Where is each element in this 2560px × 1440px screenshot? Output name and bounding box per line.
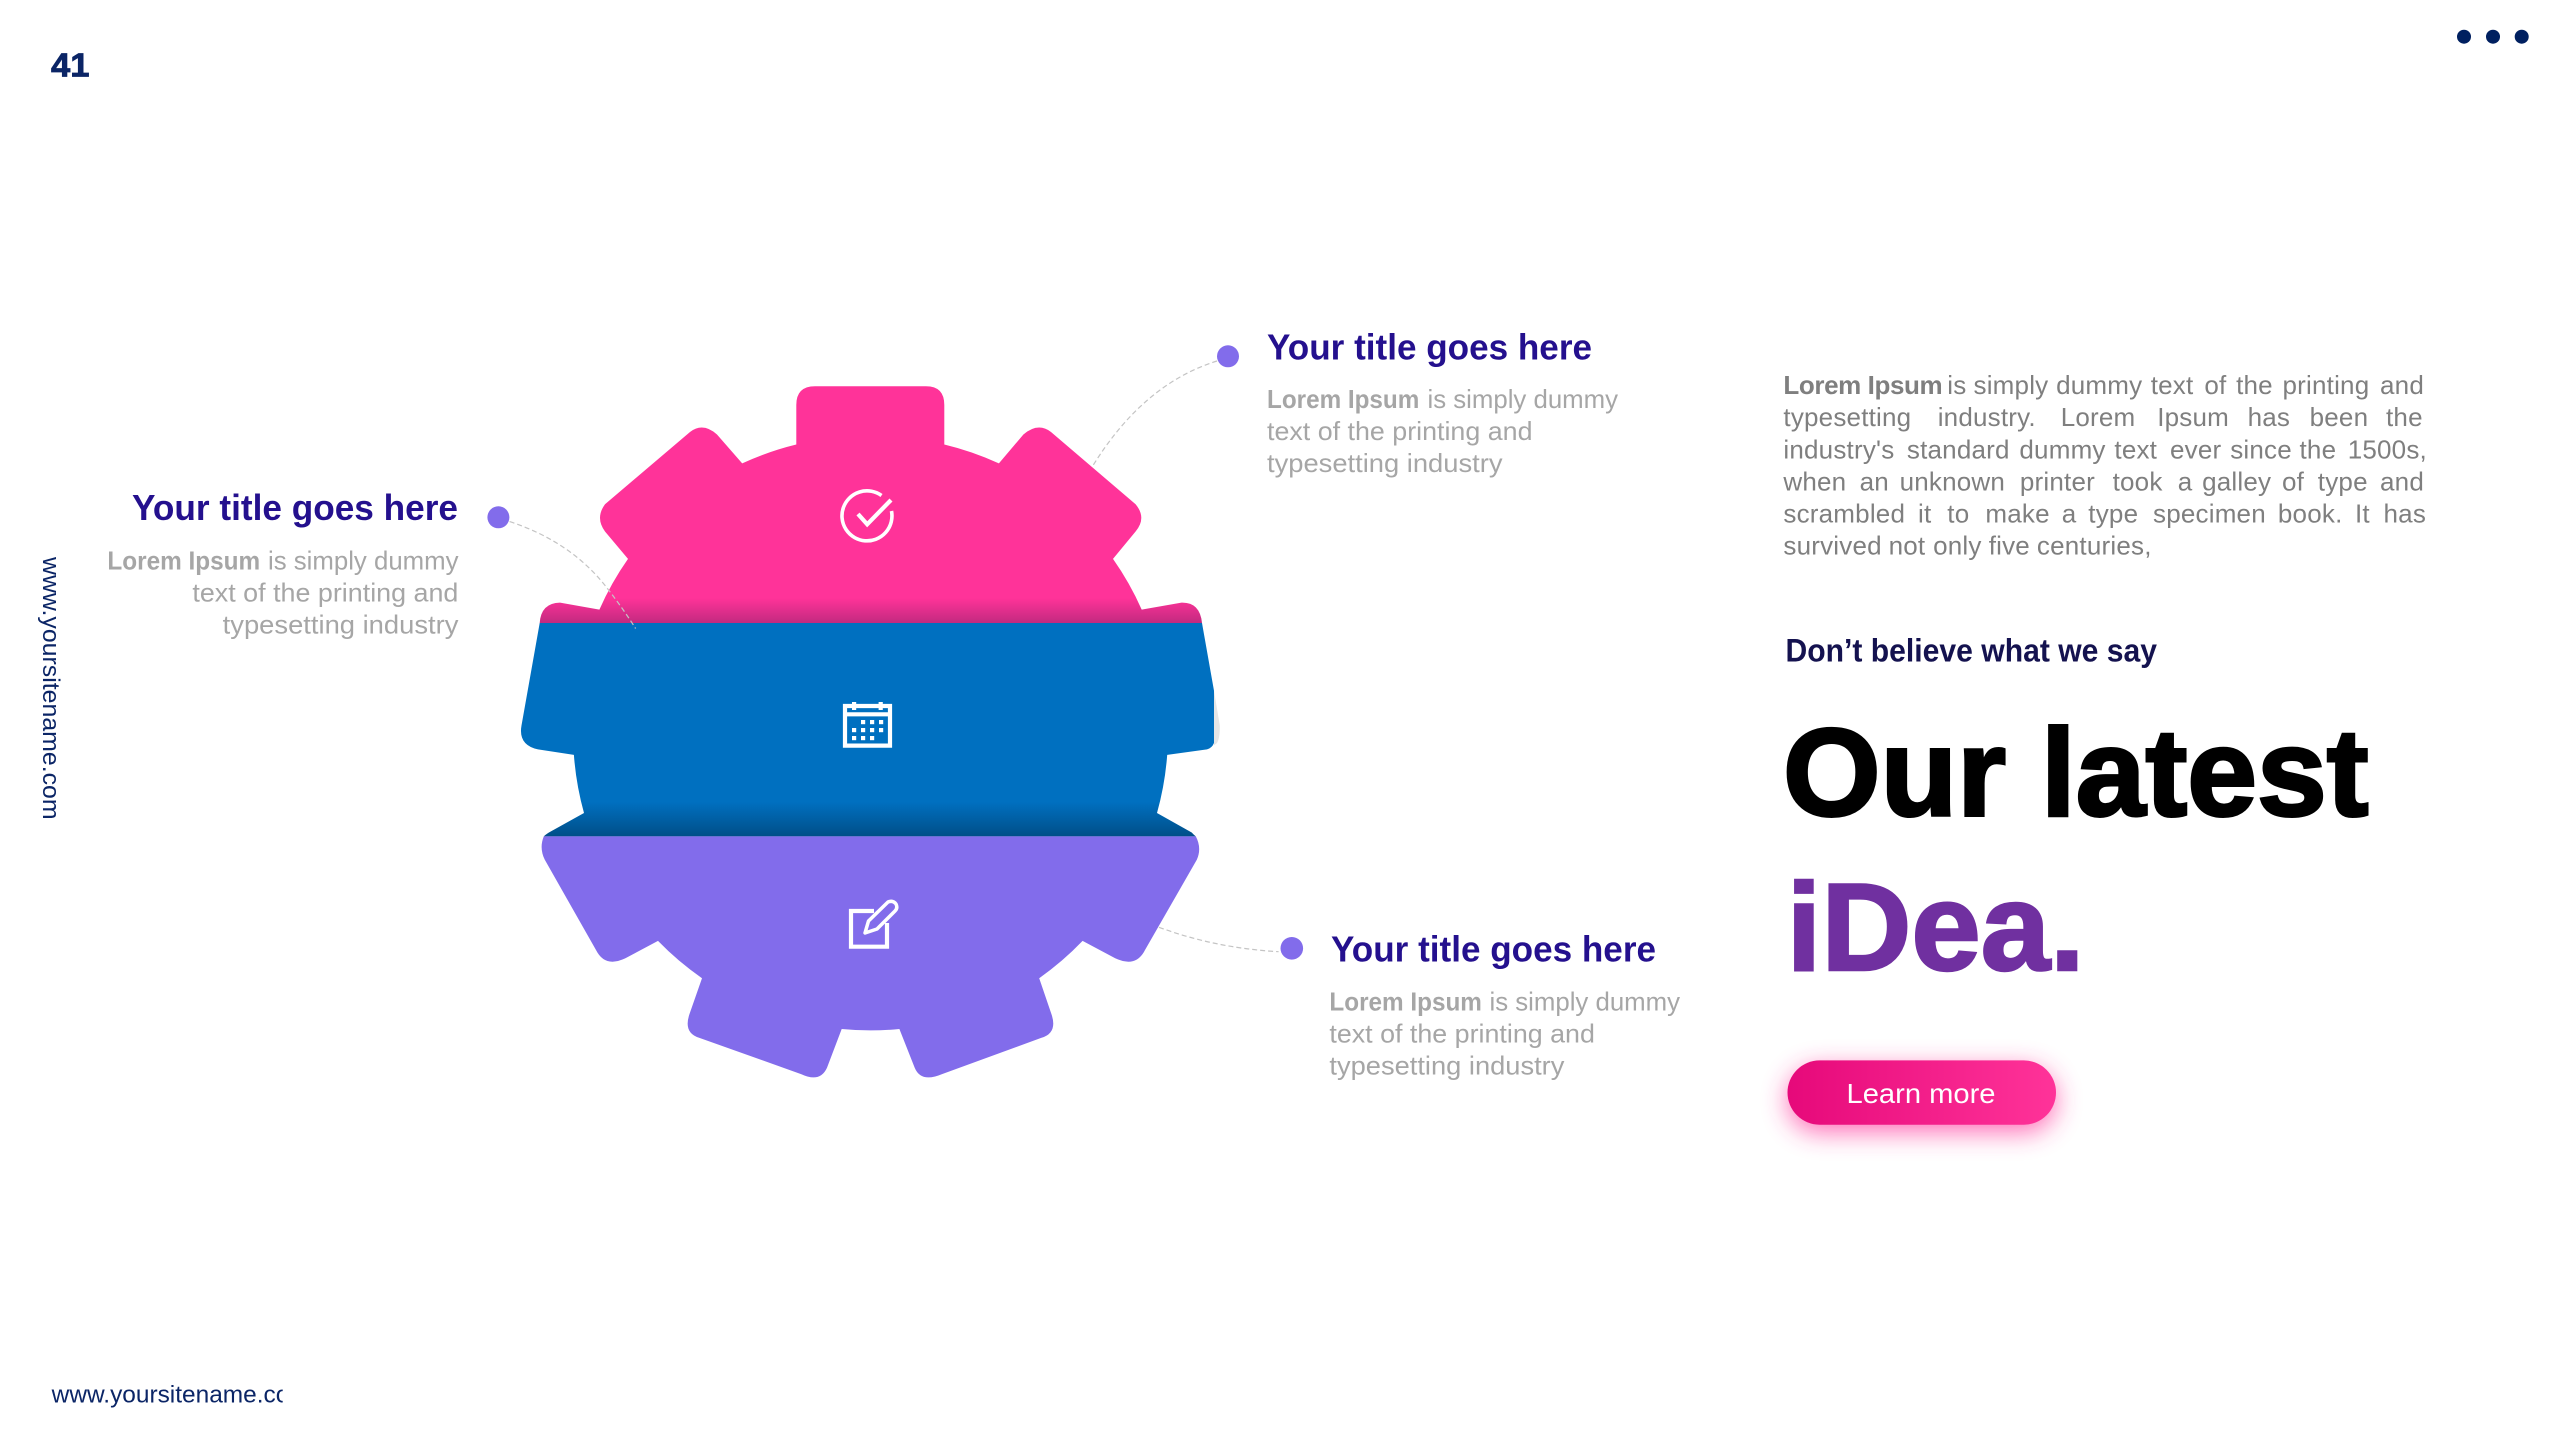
callout dot bbox=[1280, 937, 1303, 960]
gear segment: blue middle bbox=[521, 623, 1214, 836]
paragraph text block: book. bbox=[2278, 499, 2350, 529]
paragraph text block: the bbox=[2300, 434, 2344, 464]
paragraph text block: scrambled bbox=[1783, 499, 1913, 529]
paragraph text block: a bbox=[2062, 499, 2084, 529]
paragraph text block: is bbox=[1947, 370, 1974, 400]
paragraph text block: five bbox=[1989, 531, 2037, 561]
paragraph text block: dummy bbox=[2019, 434, 2113, 464]
paragraph text block: a bbox=[2178, 466, 2200, 496]
paragraph text block: text bbox=[2114, 434, 2165, 464]
vertical website text: www.yoursitename.com bbox=[37, 556, 64, 820]
paragraph text block: when bbox=[1782, 466, 1854, 496]
callout dot bbox=[1217, 345, 1239, 367]
callout text: Lorem Ipsum bbox=[1267, 384, 1419, 414]
callout text bbox=[1267, 384, 1618, 478]
paragraph text block: ever bbox=[2170, 434, 2229, 464]
gear shadow sliver bbox=[1214, 691, 1220, 745]
button: learn more: Learn more bbox=[1846, 1078, 1996, 1109]
paragraph text block: make bbox=[1985, 499, 2057, 529]
paragraph text block bbox=[1782, 370, 2427, 561]
callout text: typesetting industry bbox=[1267, 448, 1502, 478]
paragraph text block: took bbox=[2113, 466, 2170, 496]
paragraph text block: unknown bbox=[1900, 466, 2013, 496]
connector: bottom callout bbox=[1159, 927, 1279, 952]
callout text: text of the printing and bbox=[1329, 1018, 1595, 1048]
paragraph text block: has bbox=[2384, 499, 2426, 529]
paragraph text block: industry's bbox=[1783, 434, 1902, 464]
paragraph text block: Ipsum bbox=[2157, 402, 2236, 432]
callout: bottom bbox=[1280, 929, 1680, 1080]
connector: left callout bbox=[510, 522, 636, 628]
button: learn more bbox=[1788, 1060, 2056, 1132]
paragraph text block: not bbox=[1889, 531, 1933, 561]
paragraph text block: survived bbox=[1783, 531, 1889, 561]
paragraph text block: and bbox=[2380, 466, 2424, 496]
paragraph text block: text bbox=[2151, 370, 2201, 400]
callout: left bbox=[107, 487, 509, 640]
paragraph text block: galley bbox=[2202, 466, 2279, 496]
callout text: text of the printing and bbox=[1267, 416, 1532, 446]
paragraph text block: been bbox=[2310, 402, 2376, 432]
callout text: is simply dummy bbox=[268, 546, 458, 576]
callout dot bbox=[487, 506, 509, 528]
paragraph text block: It bbox=[2355, 499, 2377, 529]
subheading: Don’t believe what we say bbox=[1786, 632, 2157, 668]
paragraph text block: centuries, bbox=[2037, 531, 2152, 561]
icon: check circle bbox=[842, 491, 892, 541]
paragraph text block: industry. bbox=[1938, 402, 2043, 432]
paragraph text block: 1500s, bbox=[2348, 434, 2427, 464]
paragraph text block: standard bbox=[1907, 434, 2017, 464]
paragraph text block: the bbox=[2236, 370, 2280, 400]
paragraph text block: specimen bbox=[2153, 499, 2273, 529]
paragraph text block: type bbox=[2088, 499, 2146, 529]
callout text: text of the printing and bbox=[192, 578, 458, 608]
paragraph text block: Lorem Ipsum bbox=[1783, 370, 1949, 400]
callout title: Your title goes here bbox=[1267, 326, 1592, 367]
callout text: Lorem Ipsum bbox=[1329, 986, 1482, 1016]
gear diagram bbox=[521, 386, 1220, 1077]
heading: Our latest: Our latest bbox=[1783, 704, 2368, 842]
paragraph text block: has bbox=[2248, 402, 2298, 432]
callout text bbox=[107, 546, 459, 640]
menu dots icon bbox=[2457, 30, 2529, 44]
callout title: Your title goes here bbox=[132, 487, 458, 528]
paragraph text block: type bbox=[2318, 466, 2375, 496]
callout text: typesetting industry bbox=[1329, 1050, 1564, 1080]
callout text: Lorem Ipsum bbox=[107, 546, 260, 576]
paragraph text block: of bbox=[2282, 466, 2312, 496]
callout: top bbox=[1217, 326, 1618, 478]
gear segment: purple bottom bbox=[542, 836, 1199, 1077]
heading: iDea.: iDea. bbox=[1787, 859, 2085, 997]
paragraph text block: typesetting bbox=[1783, 402, 1919, 432]
paragraph text block: it bbox=[1918, 499, 1939, 529]
icon: edit pencil bbox=[851, 901, 897, 947]
callout text: typesetting industry bbox=[223, 610, 458, 640]
page number: 41 bbox=[51, 46, 90, 84]
icon: calendar bbox=[845, 702, 890, 746]
paragraph text block: and bbox=[2380, 370, 2424, 400]
paragraph text block: dummy bbox=[2056, 370, 2150, 400]
paragraph text block: the bbox=[2386, 402, 2423, 432]
paragraph text block: printer bbox=[2020, 466, 2102, 496]
paragraph text block: only bbox=[1933, 531, 1989, 561]
paragraph text block: an bbox=[1860, 466, 1896, 496]
callout title: Your title goes here bbox=[1331, 929, 1656, 970]
paragraph text block: to bbox=[1947, 499, 1977, 529]
paragraph text block: of bbox=[2204, 370, 2234, 400]
footer website text: www.yoursitename.com bbox=[51, 1381, 310, 1408]
callout text bbox=[1329, 986, 1680, 1080]
paragraph text block: simply bbox=[1974, 370, 2056, 400]
paragraph text block: Lorem bbox=[2061, 402, 2143, 432]
callout text: is simply dummy bbox=[1490, 986, 1680, 1016]
paragraph text block: since bbox=[2230, 434, 2299, 464]
callout text: is simply dummy bbox=[1428, 384, 1618, 414]
gear segment: pink top bbox=[540, 386, 1202, 623]
paragraph text block: printing bbox=[2282, 370, 2377, 400]
connector: top callout bbox=[1092, 361, 1217, 467]
